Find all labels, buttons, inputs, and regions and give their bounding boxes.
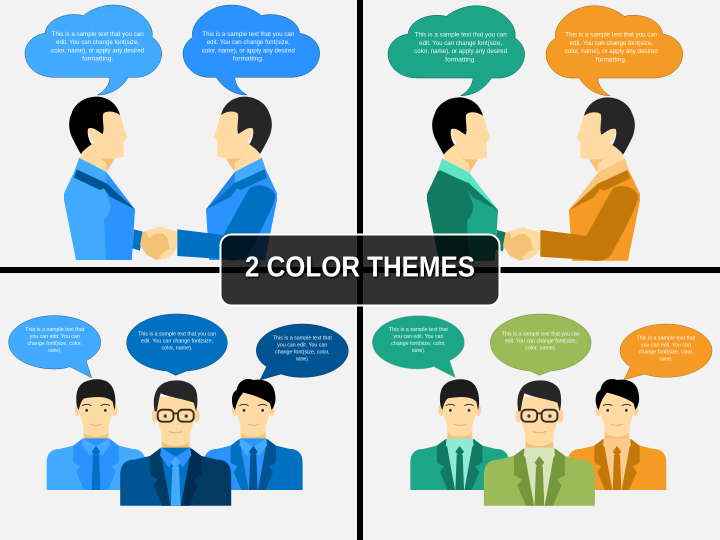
businessman right [206, 97, 277, 260]
businessman left [64, 97, 143, 260]
speech bubble orange [620, 324, 712, 380]
speech bubble one: This is a sample text that [25, 327, 85, 333]
businessman green [427, 97, 506, 261]
speech bubble three: name). [296, 356, 309, 362]
speech cloud green: formatting. [445, 57, 477, 63]
speech cloud orange: formatting. [596, 57, 627, 63]
speech bubble one: you can edit. You can [30, 334, 80, 340]
person centre with glasses [120, 380, 231, 506]
title banner [220, 234, 500, 306]
speech bubble two: This is a sample text that you can [138, 331, 216, 337]
speech cloud right [183, 5, 320, 95]
speech bubble light green: This is a sample text that you can [502, 331, 580, 337]
speech bubble orange: you can edit. You can [641, 342, 691, 348]
speech cloud green: color, name), or apply any desired [414, 49, 507, 55]
panel: blue team [9, 314, 348, 506]
panel: green team [372, 314, 712, 506]
speech bubble three: change font(size, color, [275, 349, 330, 355]
speech cloud green [388, 6, 525, 96]
speech bubble light green: color, name). [525, 345, 556, 351]
speech bubble two: color, name). [162, 345, 192, 351]
speech bubble green: name). [412, 348, 425, 354]
panel: blue handshake [25, 5, 320, 260]
speech bubble green: you can edit. You can [393, 334, 444, 340]
person left [47, 379, 145, 490]
grid divider: horizontal [0, 267, 720, 273]
speech cloud orange: edit. You can change font(size, [570, 41, 653, 47]
speech cloud left: color, name), or apply any desired [51, 48, 144, 54]
speech cloud left [25, 5, 162, 95]
speech bubble three: This is a sample text that [273, 335, 332, 341]
speech cloud orange: This is a sample text that you can [565, 33, 657, 39]
speech cloud right: formatting. [233, 57, 264, 63]
speech cloud left: formatting. [82, 57, 114, 63]
speech cloud orange: color, name), or apply any desired [565, 49, 658, 55]
person orange [568, 379, 666, 490]
speech cloud right: color, name), or apply any desired [202, 48, 295, 54]
speech bubble green: change font(size, color, [391, 341, 446, 347]
businessman orange [569, 97, 640, 261]
speech bubble one [9, 316, 101, 378]
speech bubble orange: change font(size, color, [639, 349, 693, 355]
speech cloud right: edit. You can change font(size, [207, 40, 290, 46]
speech bubble one: change font(size, color, [27, 341, 82, 347]
speech bubble orange: This is a sample text that [636, 335, 696, 341]
speech bubble light green: edit. You can change font(size, [505, 338, 577, 344]
speech cloud right: This is a sample text that you can [202, 32, 294, 38]
speech cloud left: edit. You can change font(size, [56, 40, 140, 46]
person light green with glasses [484, 380, 595, 506]
speech bubble green: This is a sample text that [389, 327, 448, 333]
speech bubble one: name). [48, 348, 61, 354]
handshake and sleeve [140, 185, 275, 260]
grid divider: vertical [357, 0, 363, 540]
speech bubble three [256, 324, 348, 380]
speech bubble orange: name). [660, 356, 672, 362]
handshake and sleeve [503, 186, 638, 261]
title text: 2 COLOR THEMES [245, 252, 475, 284]
speech bubble two [127, 314, 227, 375]
speech cloud green: This is a sample text that you can [415, 33, 507, 39]
speech cloud green: edit. You can change font(size, [419, 41, 503, 47]
panel: green and orange handshake [388, 6, 683, 261]
speech bubble green [372, 316, 464, 378]
person green [410, 379, 509, 490]
person right [204, 379, 303, 490]
speech bubble light green [490, 314, 591, 375]
speech bubble three: you can edit. You can [277, 342, 327, 348]
speech bubble two: edit. You can change font(size, [141, 338, 213, 344]
speech cloud left: This is a sample text that you can [52, 32, 144, 38]
speech cloud orange [546, 6, 683, 96]
